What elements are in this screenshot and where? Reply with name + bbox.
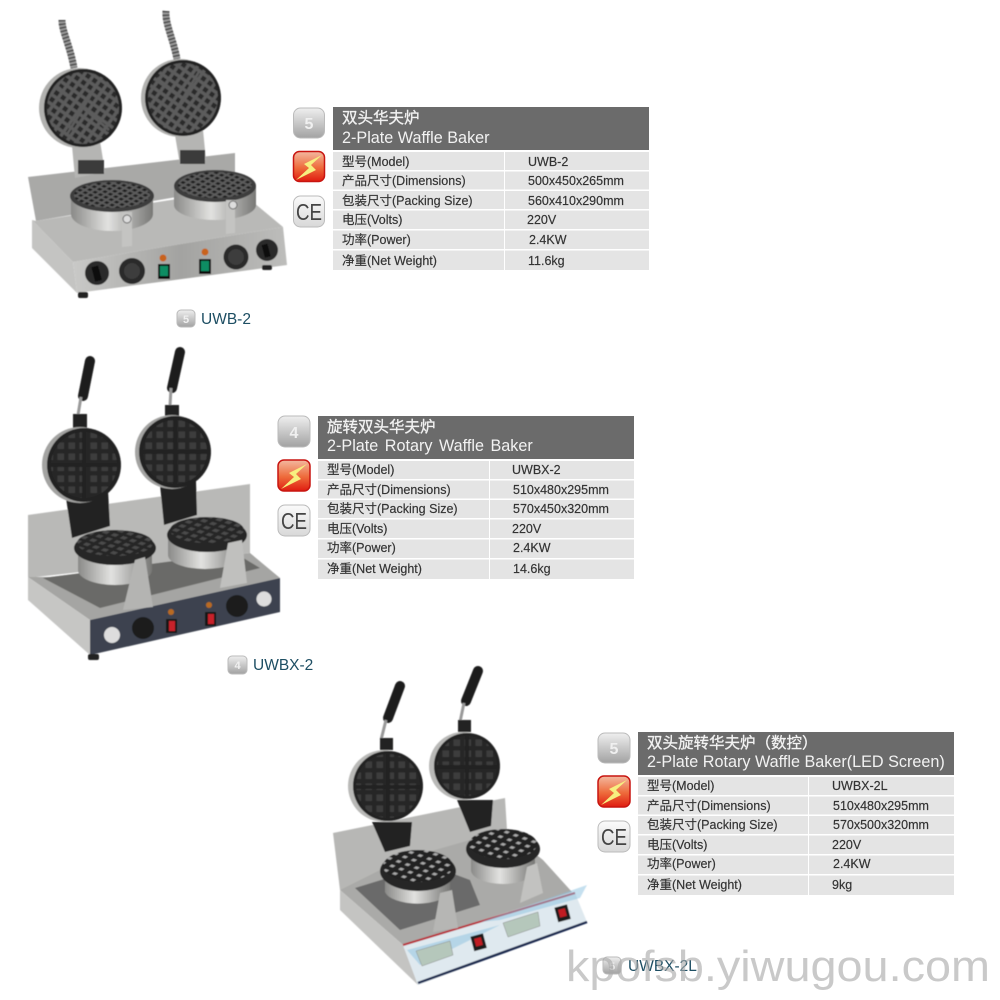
icon column: UWBX-2L — [598, 733, 630, 852]
spec table: UWB-2 — [333, 107, 649, 270]
spec table: UWB-2: 双头华夫炉 — [342, 109, 420, 127]
spec table: UWBX-2: 电压(Volts) — [327, 522, 387, 536]
spec table: UWBX-2L — [638, 732, 954, 895]
spec table: UWBX-2: 2-Plate Rotary Waffle Baker — [327, 437, 533, 455]
spec table: UWBX-2L: 220V — [832, 838, 862, 852]
spec table: UWB-2: 220V — [527, 213, 557, 227]
caption: UWBX-2: 4 — [234, 660, 241, 672]
spec table: UWB-2: 500x450x265mm — [528, 174, 624, 188]
spec table: UWBX-2: 220V — [512, 522, 542, 536]
spec table: UWB-2: UWB-2 — [528, 155, 568, 169]
caption: UWB-2: 5 — [183, 314, 189, 326]
spec table: UWBX-2: 510x480x295mm — [513, 483, 609, 497]
spec table: UWBX-2L: 电压(Volts) — [647, 838, 707, 852]
spec table: UWBX-2: 570x450x320mm — [513, 502, 609, 516]
spec table: UWBX-2L: 2-Plate Rotary Waffle Baker(LED Screen) — [647, 753, 945, 771]
spec table: UWB-2: 560x410x290mm — [528, 194, 624, 208]
spec table: UWBX-2 — [318, 416, 634, 579]
spec table: UWBX-2: UWBX-2 — [512, 463, 561, 477]
spec table: UWB-2: 11.6kg — [528, 254, 565, 268]
product photo: UWBX-2L LED screen waffle baker — [333, 671, 587, 985]
spec table: UWBX-2: 型号(Model) — [327, 463, 394, 477]
spec table: UWBX-2: 旋转双头华夫炉 — [327, 418, 436, 436]
spec table: UWBX-2: 净重(Net Weight) — [327, 561, 422, 576]
icon column: UWBX-2 — [278, 416, 310, 536]
spec table: UWBX-2L: 净重(Net Weight) — [647, 877, 742, 892]
spec table: UWB-2: 包装尺寸(Packing Size) — [342, 194, 473, 208]
spec table: UWB-2: 2.4KW — [529, 233, 567, 247]
spec table: UWBX-2L: 型号(Model) — [647, 779, 714, 793]
caption: UWB-2 — [177, 310, 251, 328]
product photo: UWB-2 waffle baker — [28, 11, 287, 298]
spec table: UWBX-2L: 570x500x320mm — [833, 818, 929, 832]
icon column: UWBX-2L: 5 — [610, 741, 619, 758]
spec table: UWB-2: 型号(Model) — [342, 155, 409, 169]
product photo: UWBX-2 rotary waffle baker — [28, 352, 280, 660]
caption: UWBX-2L: 5 — [609, 961, 615, 973]
caption: UWBX-2L — [603, 957, 697, 975]
spec table: UWBX-2: 产品尺寸(Dimensions) — [327, 483, 451, 497]
spec table: UWB-2: 功率(Power) — [342, 232, 411, 247]
icon column: UWBX-2L: CE — [601, 824, 627, 850]
spec table: UWBX-2L: 510x480x295mm — [833, 799, 929, 813]
caption: UWBX-2L: UWBX-2L — [628, 958, 697, 975]
spec table: UWB-2: 电压(Volts) — [342, 213, 402, 227]
spec table: UWBX-2L: 9kg — [832, 878, 852, 892]
spec table: UWB-2: 2-Plate Waffle Baker — [342, 129, 490, 147]
caption: UWBX-2: UWBX-2 — [253, 657, 313, 674]
icon column: UWBX-2: 4 — [290, 425, 299, 442]
watermark: kpofsb.yiwugou.com — [566, 942, 990, 991]
spec table: UWBX-2L: 双头旋转华夫炉（数控） — [647, 734, 818, 752]
spec table: UWBX-2L: 产品尺寸(Dimensions) — [647, 799, 771, 813]
spec table: UWBX-2: 14.6kg — [513, 562, 551, 576]
spec table: UWBX-2L: 2.4KW — [833, 857, 871, 871]
caption: UWB-2: UWB-2 — [201, 311, 251, 328]
spec table: UWBX-2: 2.4KW — [513, 541, 551, 555]
icon column: UWBX-2: CE — [281, 508, 307, 534]
spec table: UWB-2: 净重(Net Weight) — [342, 253, 437, 268]
icon column: UWB-2: 5 — [305, 116, 314, 133]
icon column: UWB-2: CE — [296, 199, 322, 225]
spec table: UWBX-2L: 功率(Power) — [647, 856, 716, 871]
spec table: UWBX-2: 功率(Power) — [327, 540, 396, 555]
spec table: UWBX-2: 包装尺寸(Packing Size) — [327, 502, 458, 516]
caption: UWBX-2 — [228, 656, 313, 674]
spec table: UWBX-2L: UWBX-2L — [832, 779, 888, 793]
icon column: UWB-2 — [294, 108, 324, 227]
spec table: UWBX-2L: 包装尺寸(Packing Size) — [647, 818, 778, 832]
spec table: UWB-2: 产品尺寸(Dimensions) — [342, 174, 466, 188]
